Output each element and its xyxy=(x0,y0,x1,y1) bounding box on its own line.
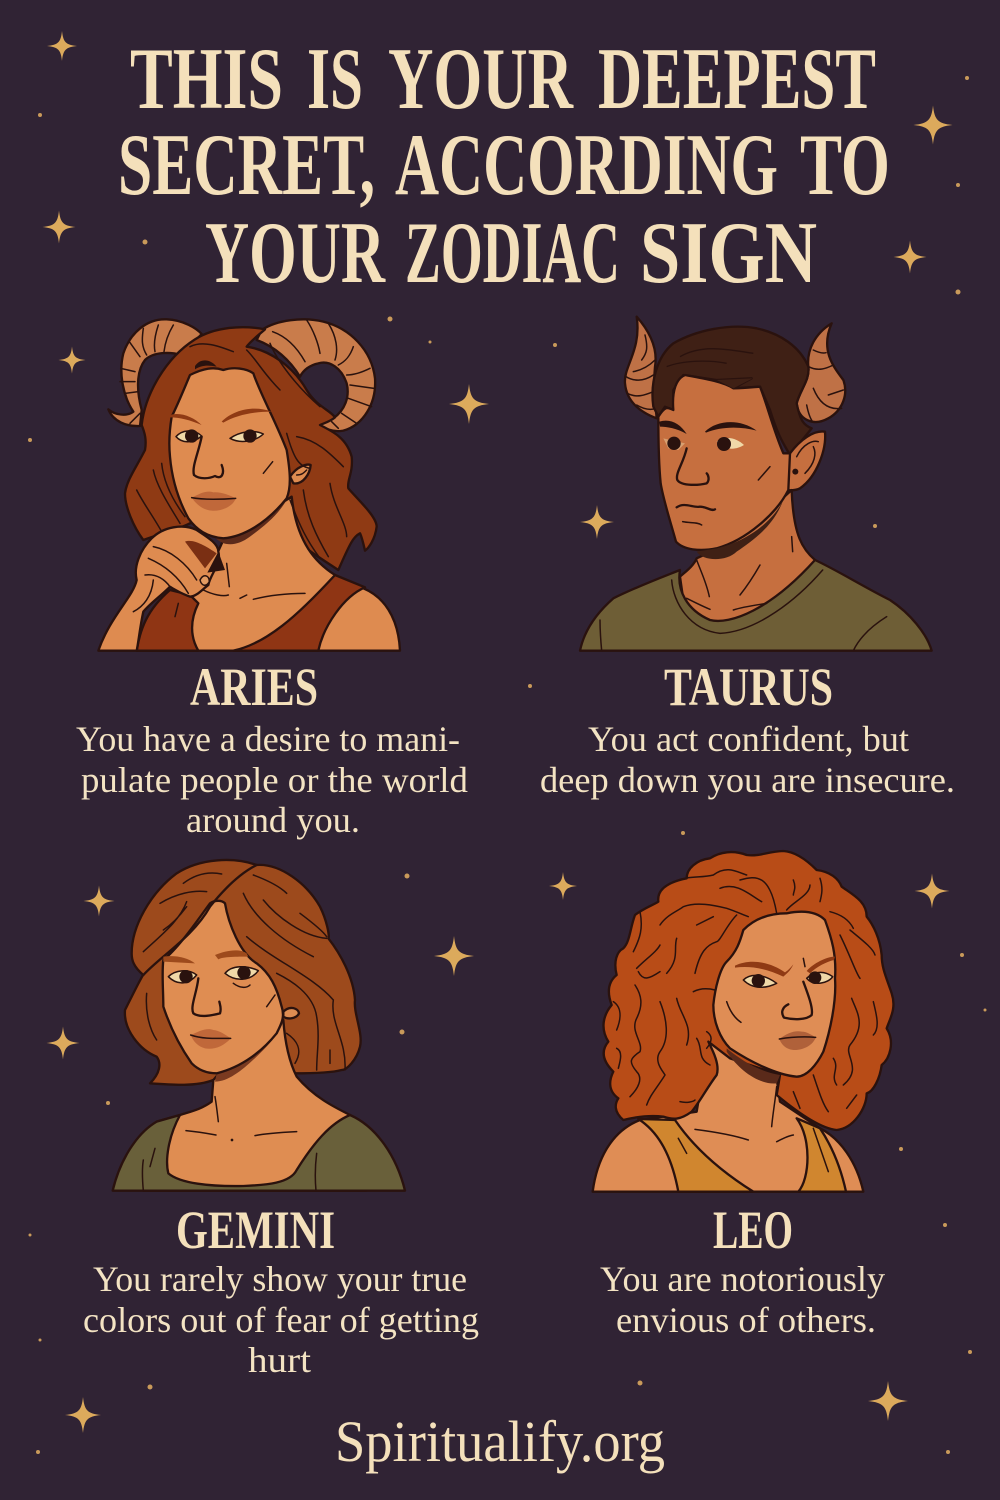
footer brand: Spiritualify.org xyxy=(335,1409,665,1474)
Leo heading: LEO xyxy=(713,1200,793,1260)
title: SIGN xyxy=(640,205,817,302)
portrait: Leo woman with curly red hair xyxy=(593,851,893,1192)
Gemini description: colors out of fear of getting xyxy=(83,1300,479,1340)
Aries heading: ARIES xyxy=(190,657,318,717)
Leo description xyxy=(600,1259,885,1340)
Gemini description: You rarely show your true xyxy=(93,1259,467,1299)
Aries description: around you. xyxy=(186,800,360,840)
Gemini label xyxy=(83,1200,479,1380)
Leo description: You are notoriously xyxy=(600,1259,885,1299)
title: THIS xyxy=(130,31,283,128)
Aries description: You have a desire to mani- xyxy=(76,719,460,759)
title: YOUR xyxy=(388,31,574,128)
title: ZODIAC xyxy=(405,205,620,302)
Taurus description: You act confident, but xyxy=(588,719,909,759)
Taurus heading: TAURUS xyxy=(664,657,833,717)
title: DEEPEST xyxy=(598,31,876,128)
portrait: Aries woman with ram horns xyxy=(98,319,400,651)
Leo label xyxy=(600,1200,885,1340)
Gemini heading: GEMINI xyxy=(176,1200,335,1260)
Aries description: pulate people or the world xyxy=(81,760,468,800)
title xyxy=(118,31,890,302)
title: IS xyxy=(307,31,363,128)
title: SECRET, xyxy=(118,117,375,214)
title: TO xyxy=(800,117,890,214)
Taurus description xyxy=(540,719,955,800)
Leo description: envious of others. xyxy=(616,1300,876,1340)
Gemini description xyxy=(83,1259,479,1380)
portrait: Gemini woman with wavy bob xyxy=(113,860,405,1191)
portrait: Taurus man with bull horns xyxy=(580,317,932,651)
Gemini description: hurt xyxy=(248,1340,311,1380)
Taurus description: deep down you are insecure. xyxy=(540,760,955,800)
Taurus label xyxy=(540,657,955,800)
Aries description xyxy=(76,719,468,840)
title: ACCORDING xyxy=(395,117,778,214)
Aries label xyxy=(76,657,468,840)
title: YOUR xyxy=(205,205,386,302)
